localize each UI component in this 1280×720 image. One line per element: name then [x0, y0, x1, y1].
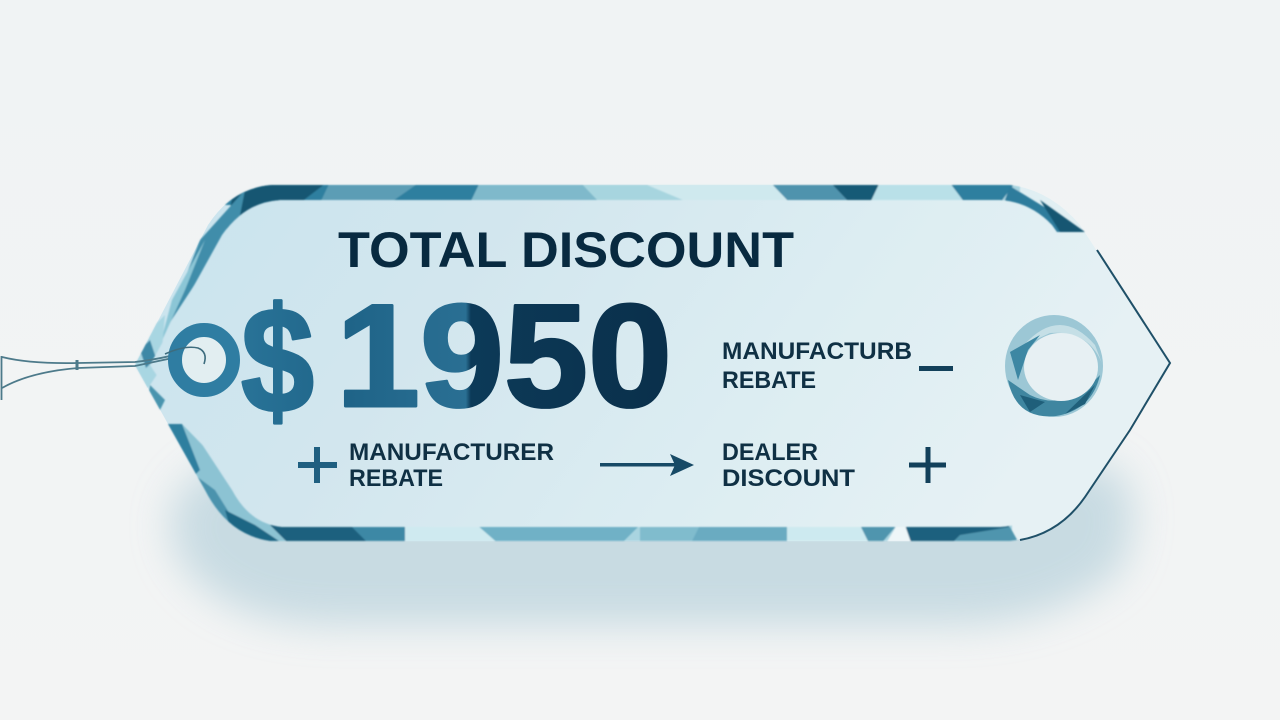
price tag panel — [130, 180, 1170, 545]
icon: plus right — [909, 447, 946, 483]
title: TOTAL DISCOUNT — [338, 222, 794, 278]
string hook over ring — [165, 347, 205, 364]
string loop — [2, 348, 205, 400]
label: manufacturer rebate, bottom left: MANUFACTURER — [349, 439, 554, 466]
right eyelet — [1005, 315, 1103, 417]
label: manufacturer rebate, right: MANUFACTURB — [722, 338, 912, 365]
faceted glass border — [130, 180, 1085, 545]
label: manufacturer rebate, right — [722, 338, 912, 394]
left eyelet ring — [175, 330, 233, 390]
label: manufacturer rebate, bottom left — [349, 439, 554, 492]
label: dealer discount: DEALER — [722, 439, 818, 466]
tag drop shadow — [171, 465, 1133, 625]
icon: plus left — [298, 447, 337, 483]
amount — [241, 274, 672, 444]
icon: arrow — [600, 454, 694, 476]
dollar sign: $ — [241, 276, 314, 444]
tag body — [135, 185, 1170, 541]
number: 1950 — [336, 274, 672, 437]
icon: minus — [919, 366, 953, 371]
label: dealer discount: DISCOUNT — [722, 465, 855, 492]
label: dealer discount — [722, 439, 855, 492]
label: manufacturer rebate, right: REBATE — [722, 367, 816, 394]
right edge line — [1020, 250, 1170, 540]
label: manufacturer rebate, bottom left: REBATE — [349, 465, 443, 492]
